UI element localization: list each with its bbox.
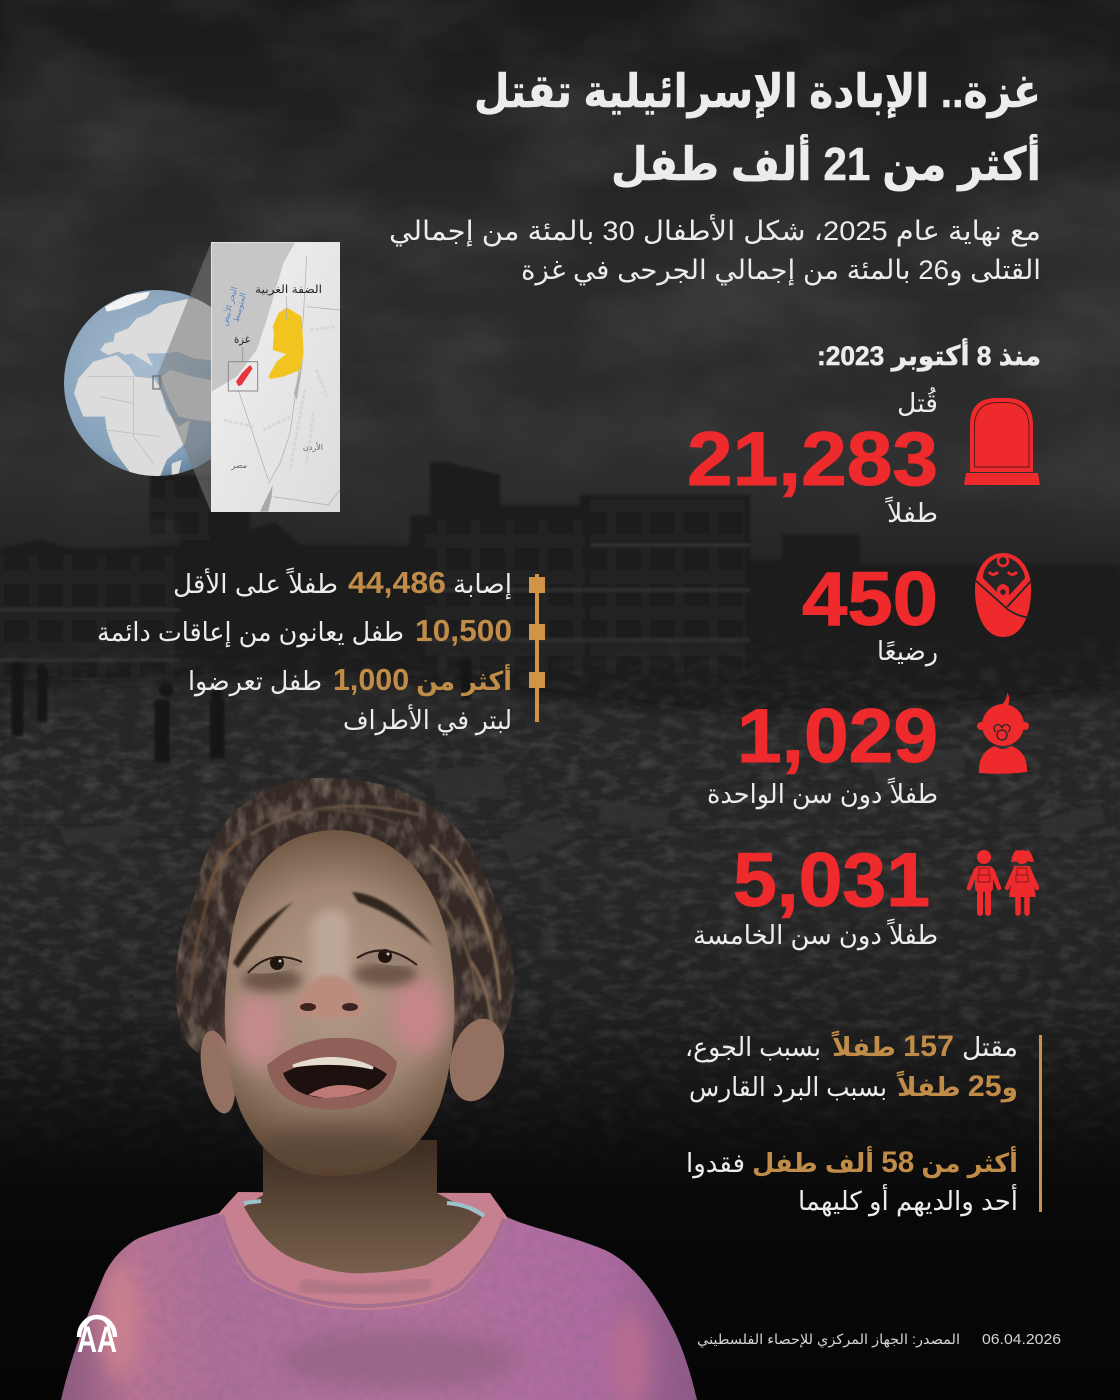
injuries list: 10,500 xyxy=(415,613,512,648)
injuries list: إصابة xyxy=(453,569,512,600)
undershirt strap xyxy=(244,1201,484,1216)
stat: under one year 1,029 xyxy=(707,692,1029,810)
subtitle: مع نهاية عام 2025، شكل الأطفال 30 بالمئة من إجمالي xyxy=(389,213,1041,247)
stat: killed 21,283: قُتل xyxy=(897,386,938,418)
stat: under one year 1,029: طفلاً دون سن الواحدة xyxy=(707,777,938,810)
icon: tombstone xyxy=(964,398,1040,485)
logo: AA: AA xyxy=(77,1319,117,1360)
icon: swaddled baby xyxy=(975,553,1031,637)
title xyxy=(474,65,1041,191)
map panel xyxy=(211,242,340,512)
causes note: أحد والديهم أو كليهما xyxy=(798,1183,1018,1217)
gold timeline marker xyxy=(529,574,545,722)
subtitle xyxy=(389,213,1041,286)
face xyxy=(225,830,454,1176)
zoom wedge xyxy=(157,243,211,512)
eyes xyxy=(248,959,302,974)
gold vertical rule xyxy=(1039,1035,1042,1212)
causes note: مقتل xyxy=(962,1032,1018,1062)
stat: killed 21,283: 21,283 xyxy=(687,417,938,502)
causes note: أكثر من 58 ألف طفل xyxy=(752,1146,1018,1179)
causes note: بسبب الجوع، xyxy=(685,1032,821,1063)
mouth xyxy=(267,1038,397,1110)
causes note: و25 طفلاً xyxy=(896,1070,1018,1103)
photo: crying child xyxy=(60,775,700,1400)
nose xyxy=(293,975,365,1018)
source and date xyxy=(697,1331,1061,1348)
West Bank xyxy=(268,307,304,379)
stat: under five 5,031 xyxy=(693,838,1037,951)
stat: infants 450: 450 xyxy=(802,557,938,642)
injuries list: طفل يعانون من إعاقات دائمة xyxy=(97,617,404,648)
injuries list: طفلاً على الأقل xyxy=(173,567,338,599)
eyebrows xyxy=(233,902,293,968)
map: globe and Palestine locator xyxy=(60,242,1061,1400)
injuries list: لبتر في الأطراف xyxy=(343,703,512,736)
Gaza strip xyxy=(236,365,253,386)
source and date: 06.04.2026 xyxy=(982,1331,1061,1348)
since-date heading: منذ 8 أكتوبر 2023: xyxy=(817,338,1041,372)
stat: infants 450 xyxy=(802,553,1031,666)
map panel: المتوسط xyxy=(231,292,248,323)
shirt xyxy=(60,1192,700,1400)
stat: under five 5,031: 5,031 xyxy=(733,838,930,923)
map panel: الأردن xyxy=(303,442,323,452)
map panel: البحر الأبيض xyxy=(219,286,239,327)
stat: killed 21,283: طفلاً xyxy=(884,496,938,528)
icon: baby with pacifier xyxy=(977,692,1029,774)
title: أكثر من 21 ألف طفل xyxy=(611,134,1041,191)
injuries list: 44,486 xyxy=(348,565,446,600)
map panel: مصر xyxy=(230,461,247,470)
map panel: غزة xyxy=(234,334,250,346)
stat: killed 21,283 xyxy=(687,386,1040,528)
stat: infants 450: رضيعًا xyxy=(877,636,938,666)
title: غزة.. الإبادة الإسرائيلية تقتل xyxy=(474,65,1041,118)
subtitle: القتلى و26 بالمئة من إجمالي الجرحى في غزة xyxy=(521,255,1041,286)
causes note xyxy=(685,1030,1042,1217)
stat: under one year 1,029: 1,029 xyxy=(737,694,938,779)
stat: under five 5,031: طفلاً دون سن الخامسة xyxy=(693,918,938,951)
map panel: الضفة الغربية xyxy=(255,284,322,296)
injuries list: طفل تعرضوا xyxy=(188,666,322,697)
causes note: 157 طفلاً xyxy=(831,1030,954,1063)
source and date: المصدر: الجهاز المركزي للإحصاء الفلسطيني xyxy=(697,1331,960,1348)
ears xyxy=(195,1013,512,1116)
causes note: فقدوا xyxy=(686,1148,745,1179)
collar xyxy=(219,1192,507,1310)
icon: boy and girl xyxy=(969,850,1037,913)
causes note: بسبب البرد القارس xyxy=(689,1072,887,1103)
injuries list: أكثر من 1,000 xyxy=(333,662,512,697)
neck xyxy=(244,1140,482,1273)
hair back xyxy=(170,775,520,1075)
globe xyxy=(64,290,211,476)
injuries list xyxy=(97,565,545,736)
